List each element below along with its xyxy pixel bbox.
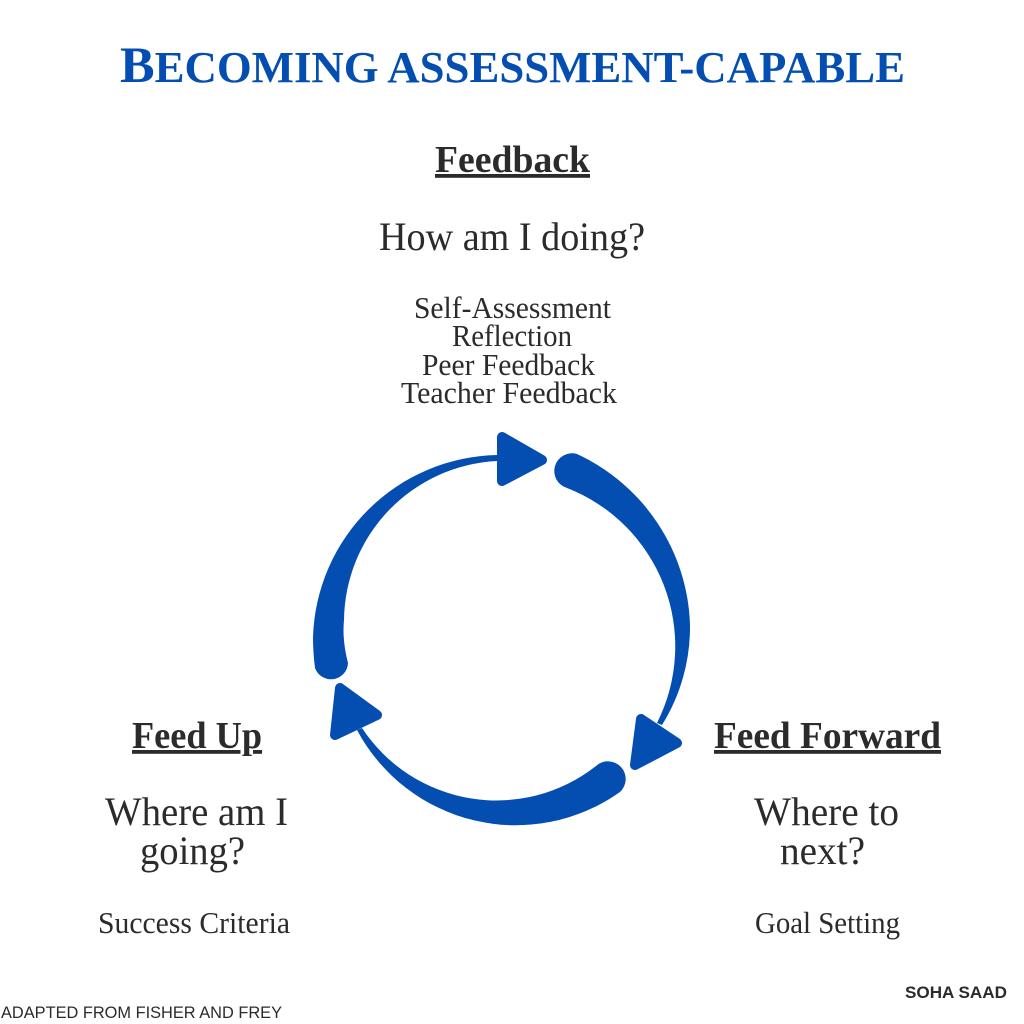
question: where am I going — [105, 789, 288, 873]
question: where to next — [754, 789, 899, 873]
arrow: feedback to feed forward — [554, 453, 690, 765]
list: feedback types: Teacher Feedback — [401, 375, 617, 410]
panel: feed up — [98, 715, 290, 940]
cycle diagram — [313, 437, 690, 825]
arrow: feed forward to feed up — [335, 688, 626, 825]
question: how am I doing: How am I doing? — [379, 214, 645, 259]
heading: feed up: Feed Up — [132, 715, 262, 757]
question: where to next: Where to — [754, 789, 899, 834]
title: BECOMING ASSESSMENT-CAPABLE — [120, 38, 905, 94]
author credit: SOHA SAAD — [905, 984, 1007, 1002]
label: success criteria: Success Criteria — [98, 905, 290, 940]
list: feedback types: Peer Feedback — [422, 347, 595, 382]
heading: feed forward: Feed Forward — [714, 715, 941, 757]
question: where am I going: going? — [140, 828, 245, 873]
list: feedback types: Self-Assessment — [414, 290, 611, 325]
label: goal setting: Goal Setting — [755, 905, 900, 940]
list: feedback types — [401, 290, 617, 410]
question: where to next: next? — [780, 828, 865, 873]
heading: feedback: Feedback — [435, 139, 591, 181]
arrow: feed up to feedback — [313, 437, 542, 679]
question: where am I going: Where am I — [105, 789, 288, 834]
list: feedback types: Reflection — [452, 318, 572, 353]
source credit: ADAPTED FROM FISHER AND FREY — [1, 1004, 282, 1022]
panel: feed forward — [714, 715, 941, 940]
panel: feedback — [379, 139, 645, 410]
